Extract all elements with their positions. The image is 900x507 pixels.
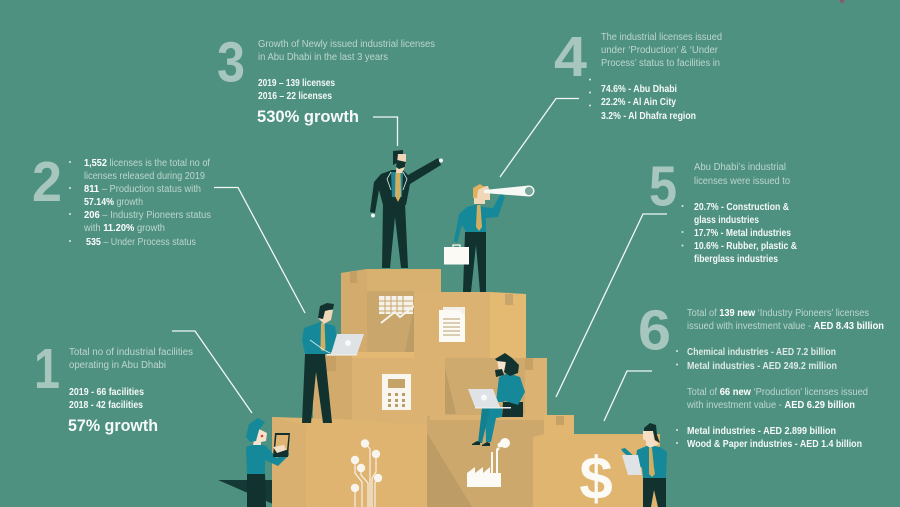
numeral 4: 4 [554, 25, 587, 89]
icon: laptop [468, 389, 511, 408]
connector 5 [556, 214, 667, 397]
section 2 bullets: 57.14% growth [84, 197, 143, 208]
section 6 text block [676, 308, 884, 450]
section 3 text block: 530% growth [257, 107, 359, 126]
numeral 3: 3 [217, 30, 245, 94]
section 3: licence growth [217, 30, 435, 146]
section 4 text block: 74.6% - Abu Dhabi [601, 84, 677, 95]
section 2 bullets: licenses released during 2019 [84, 171, 205, 182]
section 5 text block [682, 162, 797, 265]
section 6 text block: Wood & Paper industries - AED 1.4 billion [687, 439, 862, 450]
icon: circuit tree [351, 439, 382, 507]
section 5 text block: 10.6% - Rubber, plastic & [694, 241, 797, 252]
icon: bar chart and trend line [379, 296, 414, 323]
box: calculator [313, 352, 445, 426]
connector 3 [373, 117, 398, 146]
ground shadow [218, 480, 273, 504]
connector 1 [172, 331, 252, 413]
connector 4 [500, 98, 579, 177]
figure: man with laptop [302, 303, 364, 423]
section 5 text block: 20.7% - Construction & [694, 202, 789, 213]
icon: factory [467, 438, 510, 487]
box: document [414, 292, 526, 359]
connector 2 [214, 188, 305, 313]
section 5 text block: fiberglass industries [694, 254, 778, 265]
box: circuit [272, 417, 427, 507]
section 1: facilities [34, 331, 252, 435]
section 1 text block: 2019 - 66 facilities [69, 387, 144, 398]
icon: calculator [382, 374, 411, 410]
box: seat [430, 358, 547, 418]
section 4 text block: 3.2% - Al Dhafra region [601, 111, 696, 122]
top-edge marker [839, 0, 845, 4]
section 2: licence totals [32, 150, 305, 313]
section 6 text block: Metal industries - AED 2.899 billion [687, 426, 836, 437]
box: dollar [533, 434, 660, 507]
section 4 text block: under ‘Production’ & ‘Under [601, 45, 719, 56]
section 6 text block: Metal industries - AED 249.2 million [687, 361, 837, 372]
section 3 text block: 2016 – 22 licenses [258, 91, 332, 102]
section 6 text block: Chemical industries - AED 7.2 billion [687, 347, 836, 358]
section 6 text block: Total of 66 new ‘Production’ licenses issued [687, 387, 868, 398]
section 2 bullets: 206 – Industry Pioneers status [84, 210, 211, 221]
section 5 text block: glass industries [694, 215, 759, 226]
section 6 text block: with investment value - AED 6.29 billion [686, 400, 855, 411]
section 2 bullets [69, 158, 211, 248]
section 5 text block: licenses were issued to [694, 176, 790, 187]
section 4 text block: The industrial licenses issued [601, 32, 722, 43]
section 6 text block: issued with investment value - AED 8.43 billion [687, 321, 884, 332]
section 6 text block: Total of 139 new ‘Industry Pioneers’ licenses [687, 308, 869, 319]
section 4 text block: Process’ status to facilities in [601, 58, 720, 69]
numeral 1: 1 [34, 337, 60, 401]
figure: bearded man pointing [370, 150, 443, 268]
section 2 bullets: 535 – Under Process status [86, 237, 196, 248]
icon: telescope [484, 186, 534, 196]
figure: man with clipboard [621, 423, 667, 507]
box: chart [341, 269, 441, 353]
section 1 text block: Total no of industrial facilities [69, 347, 193, 358]
section 4: facility locations [500, 25, 722, 177]
section 3 text block [257, 39, 435, 126]
figure: man with telescope and briefcase [444, 184, 534, 292]
icon: briefcase [444, 245, 469, 264]
section 1 text block: 57% growth [68, 416, 158, 435]
section 4 text block [589, 32, 722, 122]
section 4 text block: 22.2% - Al Ain City [601, 97, 676, 108]
section 1 text block: operating in Abu Dhabi [69, 360, 166, 371]
box: factory [427, 415, 574, 507]
connector 6 [604, 371, 652, 421]
cardboard box pyramid [218, 269, 660, 507]
icon: clipboard [622, 455, 642, 475]
icon: tablet [273, 433, 290, 457]
section 3 text block: 2019 – 139 licenses [258, 78, 335, 89]
section 3 text block: Growth of Newly issued industrial licenses [258, 39, 435, 50]
icon: laptop [327, 334, 364, 356]
section 5 text block: Abu Dhabi’s industrial [694, 162, 786, 173]
section 6: investment value [604, 298, 884, 450]
numeral 6: 6 [638, 298, 671, 362]
section 2 bullets: 811 – Production status with [84, 184, 201, 195]
section 1 text block [68, 347, 193, 435]
section 1 text block: 2018 - 42 facilities [69, 400, 143, 411]
section 2 bullets: 1,552 licenses is the total no of [84, 158, 210, 169]
icon: document [439, 307, 465, 342]
section 3 text block: in Abu Dhabi in the last 3 years [258, 52, 388, 63]
numeral 2: 2 [32, 150, 62, 214]
section 2 bullets: with 11.20% growth [83, 223, 165, 234]
section 5 text block: 17.7% - Metal industries [694, 228, 791, 239]
figure: seated woman with laptop [468, 353, 525, 446]
figure: woman with tablet [246, 418, 290, 507]
numeral 5: 5 [649, 154, 677, 218]
section 5: industries [556, 154, 797, 397]
